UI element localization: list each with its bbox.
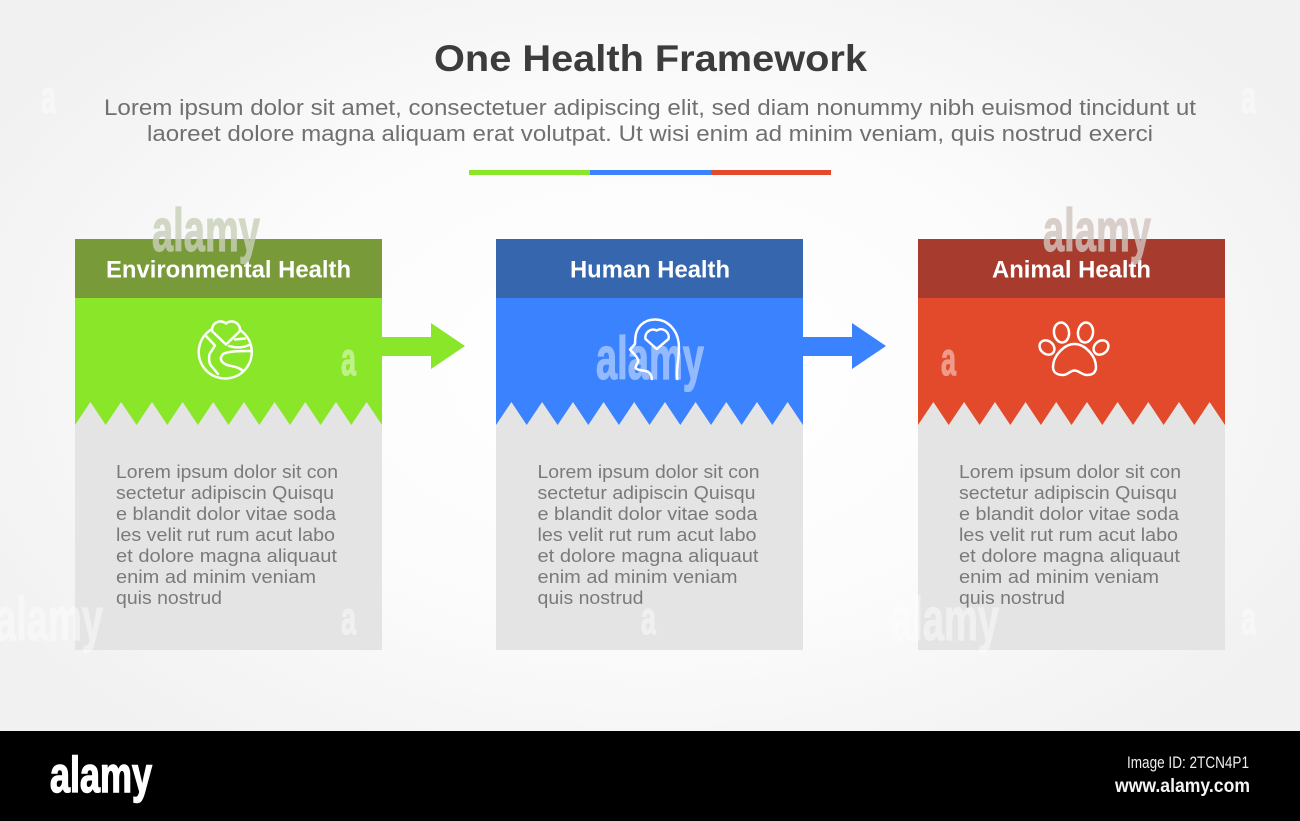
watermarks: a <box>1241 71 1256 123</box>
description: quis nostrud <box>538 588 644 608</box>
description: quis nostrud <box>116 588 222 608</box>
subtitle text: laoreet dolore magna aliquam erat volutpat. Ut wisi enim ad minim veniam, quis nostrud exerci <box>147 121 1153 146</box>
icon: head with heart <box>630 320 679 379</box>
heading: Human Health <box>570 256 730 284</box>
description: e blandit dolor vitae soda <box>538 504 759 524</box>
description: et dolore magna aliquaut <box>116 546 337 566</box>
watermarks: a <box>341 592 356 644</box>
icon: paw print <box>1037 322 1111 375</box>
description: e blandit dolor vitae soda <box>959 504 1180 524</box>
description: sectetur adipiscin Quisqu <box>116 483 334 503</box>
description: les velit rut rum acut labo <box>959 525 1178 545</box>
description: sectetur adipiscin Quisqu <box>538 483 756 503</box>
description: e blandit dolor vitae soda <box>116 504 337 524</box>
body panel <box>75 400 382 650</box>
watermarks: a <box>641 592 656 644</box>
watermarks: a <box>941 333 956 385</box>
heading: Animal Health <box>992 256 1151 284</box>
watermarks: alamy <box>152 197 260 264</box>
heading: Environmental Health <box>106 256 351 284</box>
panel: animal health <box>918 239 1225 650</box>
subtitle text <box>104 95 1197 146</box>
watermarks: a <box>41 71 56 123</box>
colour band with zigzag edge <box>496 298 803 425</box>
watermarks: alamy <box>596 325 704 392</box>
colour band with zigzag edge <box>75 298 382 425</box>
footer bar <box>0 731 1300 821</box>
panel: environmental health <box>75 239 382 650</box>
watermarks: a <box>1241 592 1256 644</box>
subtitle text: Lorem ipsum dolor sit amet, consectetuer adipiscing elit, sed diam nonummy nibh euismod tincidunt ut <box>104 95 1197 120</box>
description: enim ad minim veniam <box>959 567 1159 587</box>
arrow: environmental to human <box>382 323 465 369</box>
description: Lorem ipsum dolor sit con <box>538 462 760 482</box>
description: enim ad minim veniam <box>116 567 316 587</box>
watermarks: alamy <box>891 586 999 653</box>
description: quis nostrud <box>959 588 1065 608</box>
watermarks: a <box>341 333 356 385</box>
body panel <box>918 400 1225 650</box>
tri-colour divider <box>469 170 831 175</box>
colour band with zigzag edge <box>918 298 1225 425</box>
description: les velit rut rum acut labo <box>538 525 756 545</box>
image id: Image ID: 2TCN4P1 <box>1127 753 1249 772</box>
title: One Health Framework <box>434 38 867 79</box>
watermarks <box>0 71 1256 653</box>
header <box>918 239 1225 298</box>
header <box>496 239 803 298</box>
body panel <box>496 400 803 650</box>
footer logo: alamy <box>50 747 152 803</box>
watermarks: alamy <box>0 586 103 653</box>
description: et dolore magna aliquaut <box>538 546 758 566</box>
description <box>959 462 1181 608</box>
website: www.alamy.com <box>1114 776 1250 797</box>
description <box>116 462 338 608</box>
description: Lorem ipsum dolor sit con <box>116 462 338 482</box>
icon: earth with heart <box>199 321 252 379</box>
description: les velit rut rum acut labo <box>116 525 335 545</box>
watermarks: alamy <box>1043 197 1151 264</box>
description: et dolore magna aliquaut <box>959 546 1180 566</box>
panel: human health <box>496 239 803 650</box>
arrow: human to animal <box>803 323 886 369</box>
description: Lorem ipsum dolor sit con <box>959 462 1181 482</box>
description: sectetur adipiscin Quisqu <box>959 483 1177 503</box>
description: enim ad minim veniam <box>538 567 738 587</box>
description <box>538 462 760 608</box>
header <box>75 239 382 298</box>
